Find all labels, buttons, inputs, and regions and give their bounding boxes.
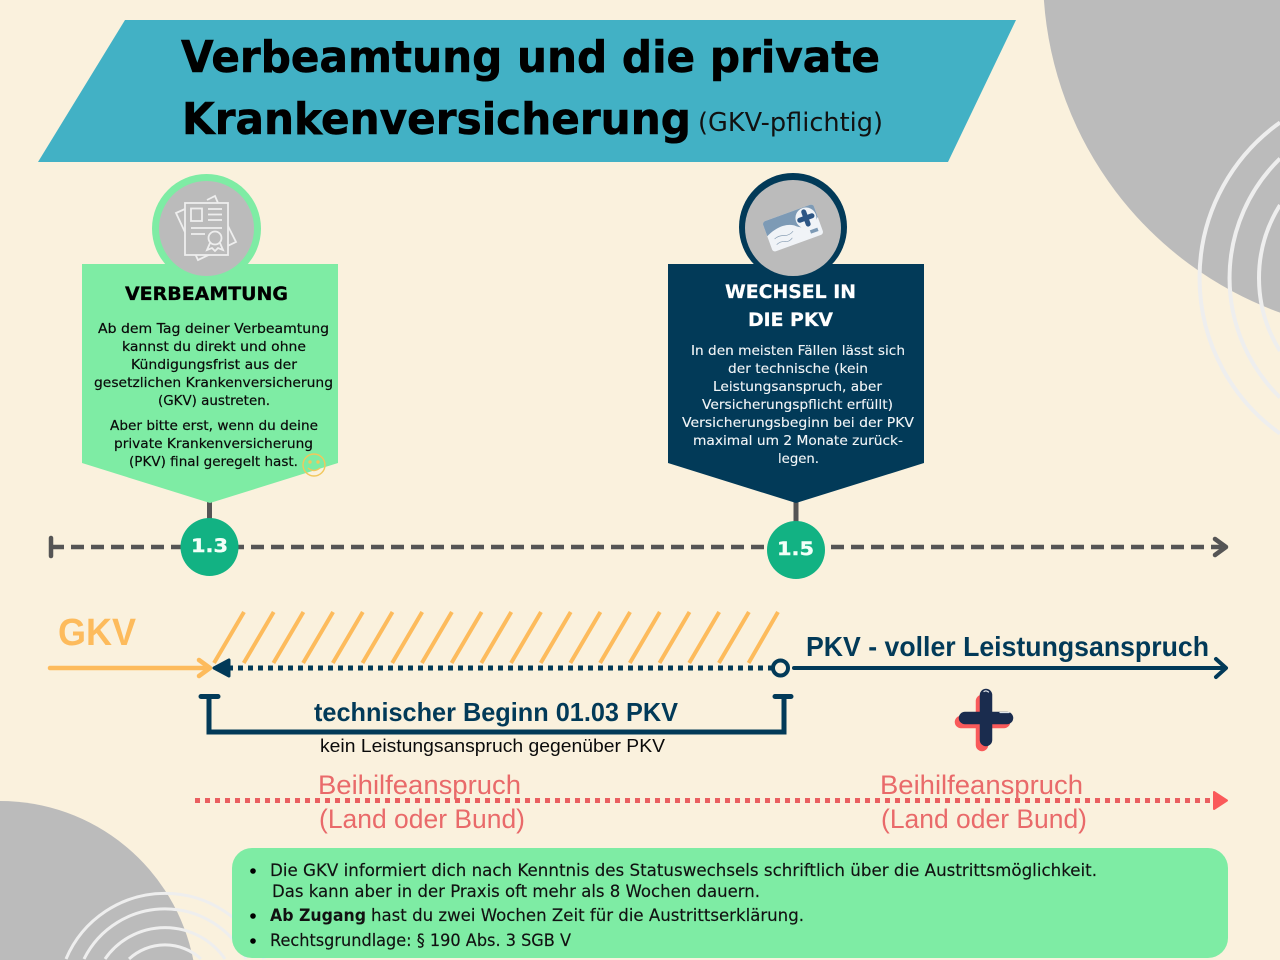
label: Beihilfe left: (Land oder Bund): [319, 804, 525, 834]
note: no benefit claim: kein Leistungsanspruch gegenüber PKV: [320, 735, 666, 756]
title: Krankenversicherung: [182, 94, 691, 145]
marker: PKV start: [773, 660, 788, 676]
text block: Verbeamtung: Kündigungsfrist aus der: [131, 357, 297, 373]
bullet list: Das kann aber in der Praxis oft mehr als 8 Wochen dauern.: [272, 882, 760, 901]
label: GKV: GKV: [58, 612, 137, 654]
timeline arrow: [51, 538, 1226, 556]
connector: 1.3: [207, 498, 212, 522]
icon: plus: [961, 691, 1009, 745]
marker: 1.3: [180, 518, 238, 576]
label: Beihilfe right: Beihilfeanspruch: [880, 770, 1083, 800]
panel: Wechsel in die PKV: [668, 173, 924, 503]
icon: certificate document: [176, 196, 236, 260]
marker: 1.5: 1.5: [777, 538, 814, 560]
bullet list: Die GKV informiert dich nach Kenntnis des Statuswechsels schriftlich über die Austrittsmöglichkeit.: [270, 861, 1097, 880]
dotted arrow: Beihilfe: [195, 792, 1227, 809]
heading: Wechsel in die PKV: WECHSEL IN: [725, 281, 856, 303]
text block: Wechsel in die PKV: Leistungsanspruch, aber: [713, 379, 882, 395]
icon: smiley: [303, 454, 325, 476]
marker: 1.3: 1.3: [191, 535, 228, 557]
bullet list: hast du zwei Wochen Zeit für die Austrittserklärung.: [371, 906, 804, 925]
label: Beihilfe left: [318, 770, 525, 834]
text block: Verbeamtung: (PKV) final geregelt hast.: [129, 454, 298, 470]
title: Verbeamtung und die private: [181, 32, 880, 83]
label: Beihilfe left: Beihilfeanspruch: [318, 770, 521, 800]
decorative circle: bottom left: [0, 801, 264, 960]
bracket: technical start: [201, 696, 791, 732]
text block: Verbeamtung: Ab dem Tag deiner Verbeamtung: [98, 321, 329, 337]
decorative circle: top right: [1044, 0, 1280, 434]
text block: Verbeamtung: [94, 321, 333, 470]
marker: 1.5: [767, 521, 825, 579]
heading: Wechsel in die PKV: [725, 281, 856, 331]
label: technical start: technischer Beginn 01.03 PKV: [314, 697, 679, 727]
text block: Verbeamtung: Aber bitte erst, wenn du deine: [110, 418, 318, 434]
text block: Verbeamtung: gesetzlichen Krankenversicherung: [94, 375, 333, 391]
text block: Wechsel in die PKV: [682, 343, 915, 467]
text block: Verbeamtung: kannst du direkt und ohne: [122, 339, 306, 355]
arrow: PKV: [794, 659, 1226, 677]
text block: Verbeamtung: (GKV) austreten.: [158, 393, 270, 409]
bullet list: [250, 861, 1097, 950]
text block: Wechsel in die PKV: Versicherungsbeginn bei der PKV: [682, 415, 915, 431]
bullet list: Rechtsgrundlage: § 190 Abs. 3 SGB V: [270, 931, 572, 950]
label: Beihilfe right: (Land oder Bund): [881, 804, 1087, 834]
heading: Verbeamtung: VERBEAMTUNG: [125, 283, 288, 305]
text block: Wechsel in die PKV: In den meisten Fällen lässt sich: [691, 343, 905, 359]
text block: Verbeamtung: private Krankenversicherung: [114, 436, 313, 452]
text block: Wechsel in die PKV: Versicherungspflicht erfüllt): [702, 397, 893, 413]
text block: Wechsel in die PKV: der technische (kein: [728, 361, 868, 377]
arrow: GKV: [50, 660, 210, 676]
dotted arrow: technical start: [214, 660, 772, 676]
panel: notes: [232, 848, 1228, 958]
label: PKV: PKV - voller Leistungsanspruch: [806, 631, 1209, 662]
subtitle: (GKV-pflichtig): [698, 108, 883, 138]
connector: 1.5: [794, 498, 798, 525]
icon: health insurance card: [762, 204, 824, 252]
hatched waiting period: [214, 612, 778, 663]
text block: Wechsel in die PKV: legen.: [778, 451, 819, 467]
title: [181, 32, 880, 145]
label: Beihilfe right: [880, 770, 1087, 834]
bullet list: Ab Zugang: [270, 906, 366, 925]
heading: Wechsel in die PKV: DIE PKV: [748, 309, 833, 331]
title banner: [38, 20, 1016, 162]
text block: Wechsel in die PKV: maximal um 2 Monate zurück-: [693, 433, 903, 449]
panel: Verbeamtung: [82, 174, 338, 503]
